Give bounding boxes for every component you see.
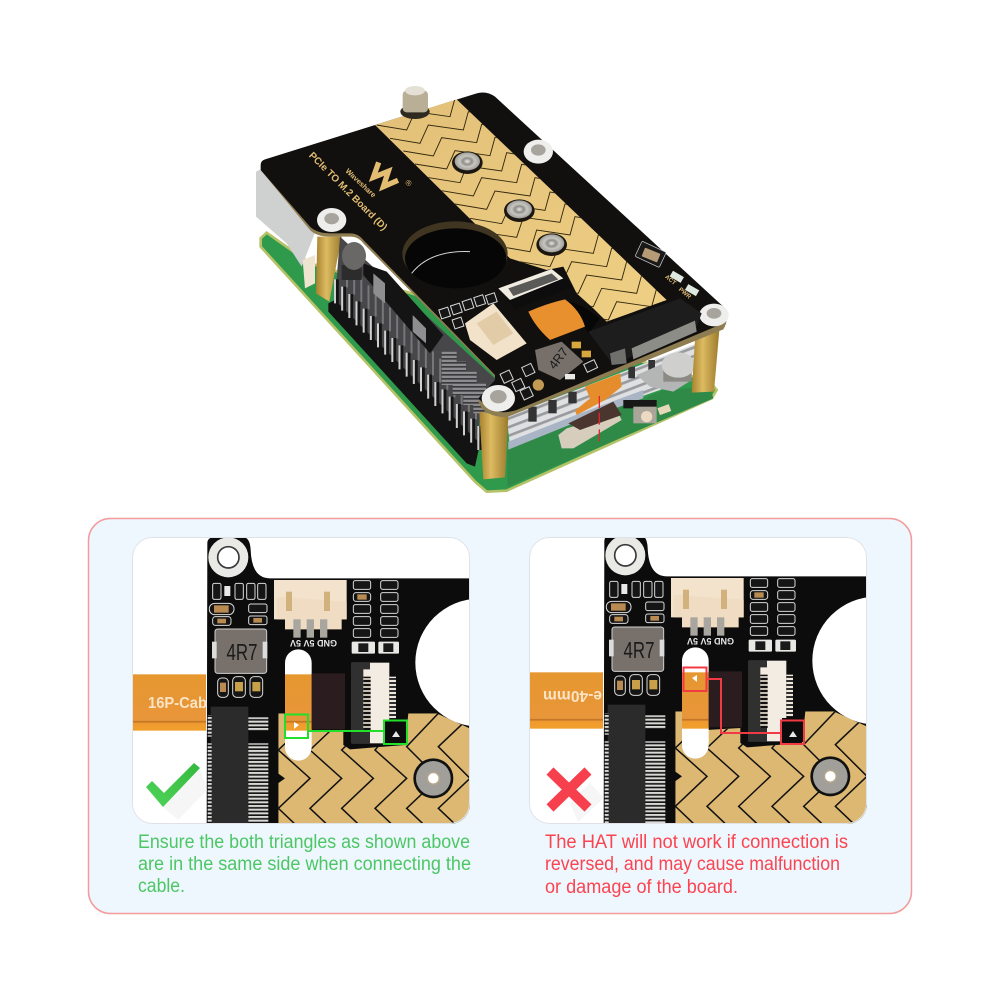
ACT label: ACT	[663, 274, 677, 287]
USB port	[256, 169, 317, 267]
black plate	[261, 93, 727, 412]
thumb screw	[400, 86, 430, 119]
front brass standoff	[479, 412, 508, 479]
cable triangle	[294, 722, 299, 729]
fan cable connector	[303, 255, 315, 288]
reset button	[623, 400, 671, 423]
reversed connection image	[530, 538, 867, 824]
gold chevron strip	[375, 100, 666, 322]
socket triangle	[789, 731, 797, 737]
pin labels: GND 5V 5V	[290, 638, 337, 648]
socket triangle	[392, 731, 400, 737]
bolt under plate	[637, 352, 695, 392]
LED marks	[670, 271, 699, 296]
reversed image border	[530, 538, 866, 824]
FFC socket on plate	[498, 269, 573, 309]
blue-grey thermal pad	[508, 390, 643, 450]
correct image border	[132, 538, 470, 824]
inductor marking: 4R7	[226, 639, 258, 665]
green instruction text: Ensure the both triangles as shown above	[138, 832, 470, 853]
orange flat cable on plate	[528, 299, 600, 340]
green base PCB	[261, 233, 717, 492]
PWR label: PWR	[677, 287, 692, 301]
black chip strip	[363, 263, 443, 353]
product photo: Raspberry Pi with PCIe TO M.2 Board (D)	[256, 86, 729, 492]
check mark shadow	[163, 768, 207, 820]
icon: red cross	[550, 771, 588, 808]
standoff screw 2	[504, 199, 535, 222]
green marker connection	[285, 714, 407, 744]
lower PCB strip	[507, 387, 713, 487]
fan power connector	[465, 303, 527, 360]
small components	[439, 293, 598, 400]
GPIO pins	[335, 263, 490, 450]
capacitor with coil	[342, 242, 366, 280]
cross shadow	[570, 783, 604, 822]
board detail	[530, 538, 867, 824]
green instruction text	[138, 832, 471, 897]
pin labels: GND 5V 5V	[687, 636, 734, 646]
corner screw 4	[699, 304, 729, 326]
red warning text: or damage of the board.	[545, 877, 738, 898]
red warning text: reversed, and may cause malfunction	[545, 854, 840, 875]
inductor: 4R7	[546, 345, 571, 372]
GPIO header base	[328, 300, 480, 467]
status LED component	[635, 241, 666, 268]
PCIe connector on base	[558, 402, 622, 448]
red dashed alignment line	[597, 396, 601, 445]
brand name on plate: Waveshare	[344, 167, 378, 199]
red warning text	[545, 832, 848, 898]
area under plate	[335, 237, 497, 447]
capacitor and gold pads	[533, 342, 591, 391]
flat cable under plate	[575, 373, 622, 415]
cable triangle	[692, 675, 697, 682]
red marker connection	[684, 668, 804, 744]
inductor marking: 4R7	[624, 637, 654, 663]
registered mark: ®	[403, 178, 414, 189]
corner screw 3	[482, 385, 515, 412]
reversed cable label: e-40mm	[543, 687, 602, 704]
rear brass standoff	[316, 237, 342, 302]
heat sink dark tabs	[528, 360, 655, 422]
correct connection image	[133, 538, 470, 824]
standoff screw 1	[452, 151, 483, 174]
right brass standoff	[692, 330, 719, 393]
cable label: 16P-Cab	[148, 695, 207, 712]
standoff screw 3	[536, 233, 567, 256]
fan opening	[402, 221, 508, 288]
heat sink fins	[442, 352, 486, 413]
M.2 socket	[588, 298, 702, 365]
Waveshare logo mark	[373, 162, 398, 187]
silver heat sink under plate	[507, 343, 697, 447]
corner screw 2	[317, 208, 346, 232]
green instruction text: cable.	[138, 876, 185, 897]
instruction panel	[88, 518, 940, 914]
metal tabs on chip	[373, 273, 426, 343]
icon: green check mark	[146, 763, 200, 807]
plate edge	[261, 100, 727, 417]
board detail	[133, 538, 470, 824]
red warning text: The HAT will not work if connection is	[545, 832, 848, 853]
corner screw 1	[524, 140, 553, 164]
product name on plate: PCIe TO M.2 Board (D)	[306, 150, 389, 233]
inductor	[535, 342, 583, 380]
green instruction text: are in the same side when connecting the	[138, 854, 471, 875]
